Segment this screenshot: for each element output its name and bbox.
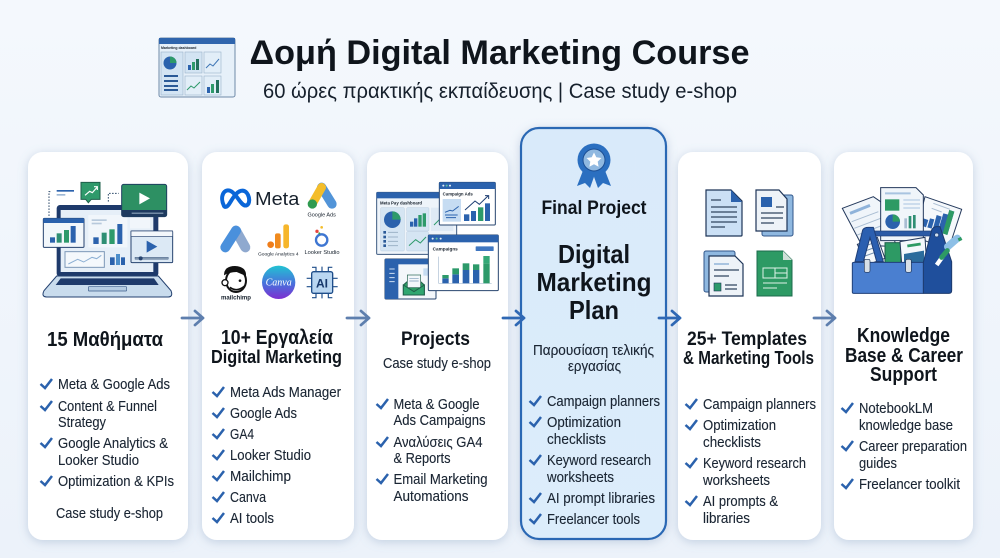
title: Δομή Digital Marketing Course [250, 34, 750, 72]
checklist: Ads Campaigns [394, 413, 486, 429]
heading: Base & Career [845, 345, 963, 367]
checklist: GA4 [230, 427, 254, 443]
heading [211, 327, 342, 367]
arrow: final project to templates [659, 311, 680, 325]
checklist: checklists [547, 432, 606, 448]
description: εργασίας [568, 359, 621, 375]
checklist: Mailchimp [230, 469, 291, 485]
checklist: Content & Funnel [58, 399, 157, 415]
checklist: AI prompts & [703, 494, 778, 510]
logo: Meta: Meta [255, 188, 300, 209]
logo: Mailchimp: mailchimp [221, 296, 251, 302]
checklist [40, 377, 174, 490]
icon: laptop with charts and video [43, 182, 173, 297]
checklist: AI tools [230, 511, 274, 527]
panel: Projects [367, 152, 508, 540]
checklist [530, 394, 660, 528]
checklist: & Reports [394, 451, 450, 467]
heading: Final Project [542, 198, 647, 219]
description [533, 343, 654, 375]
checklist: Optimization [547, 415, 621, 431]
checklist: Keyword research [703, 456, 806, 472]
checklist: guides [859, 456, 897, 472]
checklist: Keyword research [547, 453, 651, 469]
checklist: AI prompt libraries [547, 491, 655, 507]
heading: Projects [401, 328, 470, 350]
arrow: lessons to tools [182, 311, 203, 325]
heading [683, 328, 814, 368]
description: Παρουσίαση τελικής [533, 343, 654, 359]
checklist: Freelancer tools [547, 512, 640, 528]
plan title [536, 239, 652, 325]
checklist: Career preparation [859, 439, 967, 455]
checklist: Meta & Google Ads [58, 377, 170, 393]
heading: & Marketing Tools [683, 348, 814, 368]
checklist: Email Marketing [394, 472, 488, 488]
checklist [212, 385, 341, 527]
heading [845, 325, 963, 386]
header icon: marketing dashboard: Marketing dashboard [161, 46, 196, 50]
icon: template documents [704, 190, 793, 296]
checklist: worksheets [546, 470, 614, 486]
icon: campaign dashboards: Campaign Ads [443, 192, 473, 197]
icon: campaign dashboards [377, 182, 498, 299]
icon: award ribbon [577, 144, 611, 188]
icon: campaign dashboards: Meta Pay dashboard [380, 200, 422, 205]
checklist [376, 397, 488, 505]
checklist: Automations [394, 489, 468, 505]
heading: Knowledge [857, 325, 950, 347]
panel: 15 Μαθήματα [28, 152, 188, 540]
plan title: Marketing [536, 267, 652, 297]
checklist [842, 401, 967, 493]
panel: 10+ Εργαλεία [202, 152, 354, 540]
plan title: Digital [558, 239, 630, 269]
heading: 25+ Templates [687, 328, 807, 350]
checklist: Looker Studio [230, 448, 311, 464]
subheading: Case study e-shop [383, 356, 491, 372]
checklist [686, 397, 816, 527]
icon grid: tool logos [221, 187, 339, 302]
heading: Digital Marketing [211, 347, 342, 367]
arrow: templates to knowledge base [814, 311, 835, 325]
panel: Knowledge Base & Career Support [834, 152, 973, 540]
checklist: checklists [703, 435, 761, 451]
checklist: Canva [230, 490, 267, 506]
checklist: Google Ads [230, 406, 297, 422]
plan title: Plan [569, 295, 619, 325]
heading: 15 Μαθήματα [47, 329, 164, 351]
icon: toolbox with documents [842, 188, 962, 293]
checklist: worksheets [702, 473, 770, 489]
checklist: libraries [703, 511, 750, 527]
checklist: knowledge base [859, 418, 953, 434]
logo: Google Ads: Google Ads [307, 212, 336, 218]
logo: Canva: Canva [266, 278, 292, 289]
checklist: Freelancer toolkit [859, 477, 960, 493]
panel: 25+ Templates [678, 152, 821, 540]
checklist: Campaign planners [703, 397, 816, 413]
heading: 10+ Εργαλεία [221, 327, 334, 349]
checklist: Meta & Google [394, 397, 480, 413]
arrow: tools to projects [347, 311, 369, 325]
logo: AI chip: AI [316, 276, 328, 290]
panel: Final Project (highlighted) [521, 128, 666, 539]
logo: Google Ads large [225, 231, 245, 247]
icon: campaign dashboards: Campaigns [433, 246, 458, 251]
subtitle: 60 ώρες πρακτικής εκπαίδευσης | Case study e-shop [263, 80, 737, 103]
heading: Support [870, 364, 937, 386]
checklist: Campaign planners [547, 394, 660, 410]
checklist: Looker Studio [58, 453, 139, 469]
logo: Google Analytics 4: Google Analytics 4 [258, 251, 299, 256]
logo: Looker Studio: Looker Studio [304, 250, 339, 256]
checklist: Meta Ads Manager [230, 385, 341, 401]
note: Case study e-shop [56, 506, 163, 522]
header icon: marketing dashboard [159, 38, 235, 97]
checklist: Αναλύσεις GA4 [394, 435, 482, 451]
checklist: Optimization & KPIs [58, 474, 174, 490]
checklist: Strategy [58, 415, 107, 431]
checklist: Google Analytics & [58, 436, 168, 452]
arrow: projects to final project [503, 311, 524, 325]
checklist: Optimization [703, 418, 776, 434]
checklist: NotebookLM [859, 401, 933, 417]
